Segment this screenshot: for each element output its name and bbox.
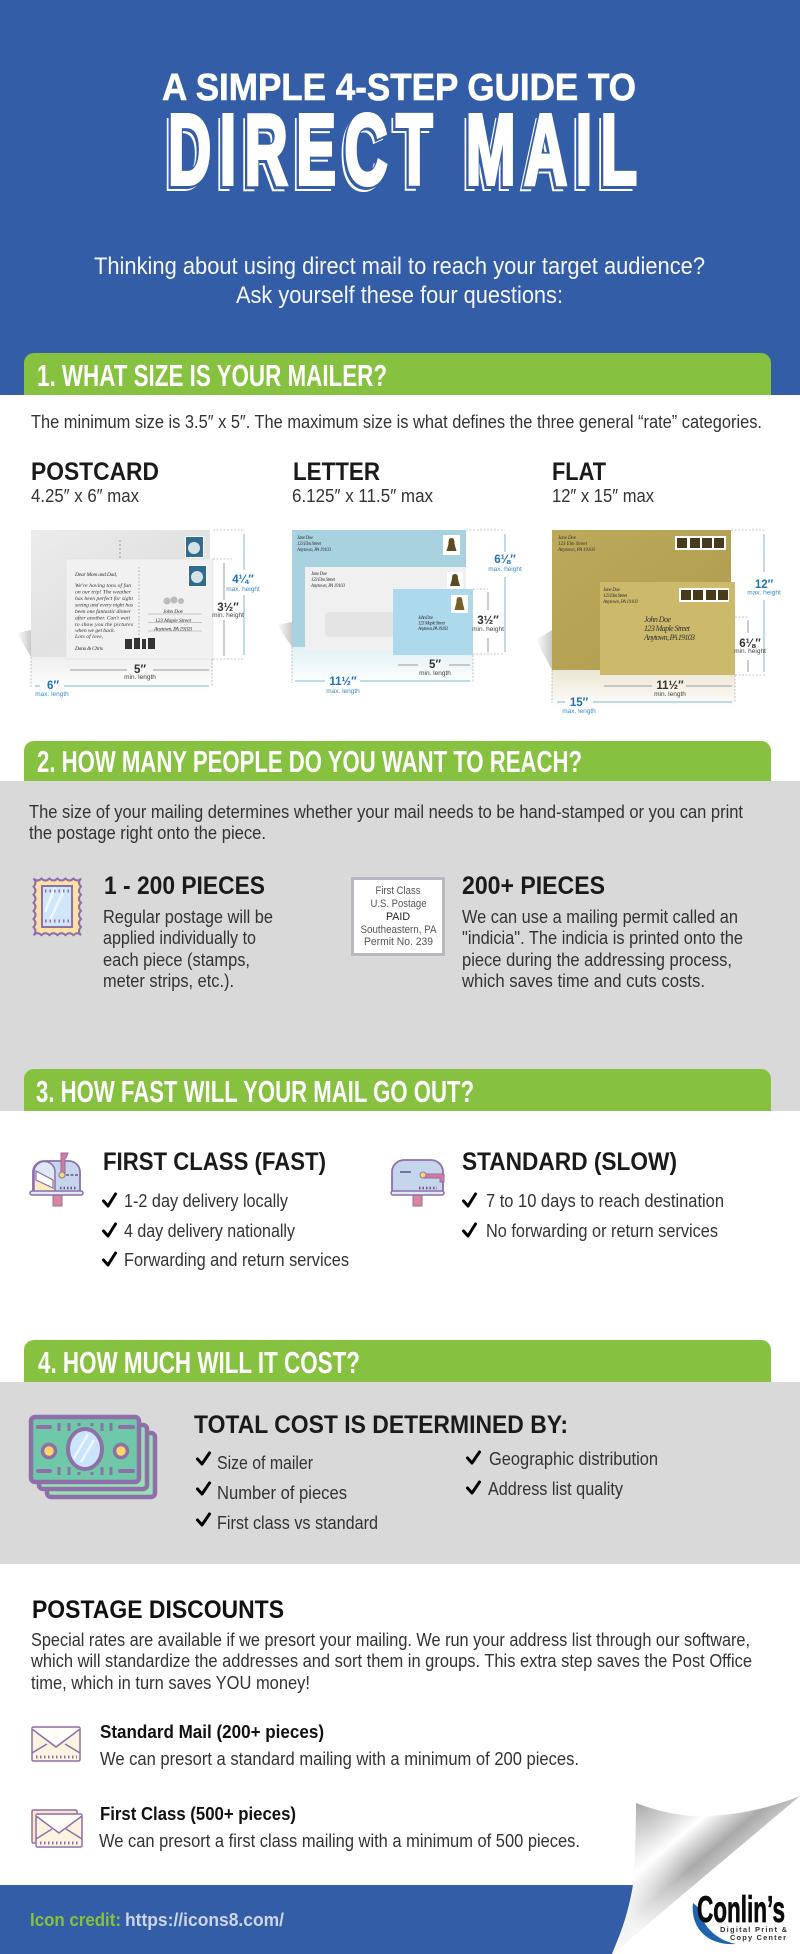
postcard illustration: on our trip! The weather bbox=[75, 590, 132, 596]
indicia box: PAID bbox=[386, 911, 410, 923]
icon: postage stamp bbox=[34, 878, 81, 935]
postage discounts text block: time, which in turn saves YOU money! bbox=[31, 1673, 310, 1693]
1-200 pieces block: Regular postage will be bbox=[103, 907, 273, 927]
flat illustration: John Doe bbox=[644, 615, 671, 624]
icon: money stack bbox=[31, 1417, 155, 1497]
letter heading: LETTER bbox=[293, 458, 380, 486]
postcard illustration: min. height bbox=[212, 612, 244, 619]
letter illustration: 123 Elm Street bbox=[311, 578, 336, 583]
200+ pieces block: which saves time and cuts costs. bbox=[461, 971, 705, 991]
standard block: STANDARD (SLOW) bbox=[462, 1148, 677, 1176]
section 2 intro text: The size of your mailing determines whether your mail needs to be hand-stamped or you can print bbox=[29, 802, 743, 822]
flat illustration: min. length bbox=[654, 691, 686, 698]
letter illustration: Jane Doe bbox=[297, 536, 314, 541]
200+ pieces block: We can use a mailing permit called an bbox=[462, 907, 738, 927]
indicia box: First Class bbox=[376, 885, 421, 897]
postcard illustration: 4¼″ bbox=[232, 574, 254, 586]
footer band bbox=[0, 1885, 633, 1954]
postcard heading bbox=[31, 458, 159, 506]
flat illustration bbox=[536, 530, 781, 715]
first class discount: First Class (500+ pieces) bbox=[100, 1804, 296, 1824]
title line 2: direct mail: DIRECT MAIL bbox=[166, 97, 635, 208]
flat illustration: 15″ bbox=[570, 697, 589, 709]
header banner bbox=[0, 0, 800, 395]
postcard illustration: max. length bbox=[35, 691, 69, 698]
flat illustration: Jane Doe bbox=[558, 536, 577, 541]
postcard illustration: after another. Can't wait bbox=[75, 614, 130, 622]
postcard illustration: 6″ bbox=[47, 680, 59, 692]
flat illustration: Anytown, PA 19103 bbox=[557, 548, 596, 553]
section 2 intro text bbox=[29, 802, 743, 843]
first class discount bbox=[99, 1804, 580, 1851]
section 2 heading: 2. HOW MANY PEOPLE DO YOU WANT TO REACH? bbox=[37, 744, 582, 779]
indicia box: Southeastern, PA bbox=[360, 924, 437, 936]
title line 2: direct mail: DIRECT MAIL bbox=[164, 99, 633, 211]
checklist: first class: Forwarding and return services bbox=[124, 1250, 349, 1270]
postcard illustration: min. length bbox=[124, 674, 156, 681]
indicia box: U.S. Postage bbox=[370, 898, 426, 910]
postcard illustration: to show you the pictures bbox=[75, 622, 133, 628]
200+ pieces block: 200+ PIECES bbox=[462, 872, 605, 900]
checklist: standard bbox=[464, 1191, 724, 1241]
postcard illustration: Lots of love, bbox=[74, 633, 104, 640]
letter illustration: max. length bbox=[326, 688, 360, 695]
icon: envelope bbox=[32, 1727, 80, 1761]
checklist: standard: No forwarding or return services bbox=[486, 1221, 718, 1241]
postcard illustration: John Doe bbox=[163, 609, 184, 615]
flat illustration: 123 Elm Street bbox=[603, 594, 628, 599]
flat illustration: min. height bbox=[734, 648, 766, 655]
postage discounts text block: POSTAGE DISCOUNTS bbox=[32, 1596, 284, 1624]
icon: open mailbox bbox=[30, 1153, 83, 1206]
flat illustration: Jane Doe bbox=[603, 588, 621, 593]
flat illustration: max. height bbox=[747, 590, 781, 596]
cost checklist right: Geographic distribution bbox=[489, 1449, 658, 1469]
letter illustration: John Doe bbox=[418, 616, 434, 621]
postcard illustration: 5″ bbox=[134, 664, 146, 676]
postcard illustration: has been perfect for sight bbox=[75, 595, 133, 602]
intro text: Ask yourself these four questions: bbox=[236, 282, 563, 309]
section 4 heading: 4. HOW MUCH WILL IT COST? bbox=[38, 1345, 360, 1380]
postcard illustration: seeing and every night has bbox=[75, 602, 133, 608]
postage discounts text block bbox=[30, 1596, 752, 1693]
cost checklist left: First class vs standard bbox=[217, 1513, 378, 1533]
200+ pieces block: piece during the addressing process, bbox=[462, 950, 732, 970]
standard mail discount: Standard Mail (200+ pieces) bbox=[100, 1722, 324, 1742]
logo: Conlin's: Digital Print & bbox=[720, 1925, 788, 1934]
letter illustration: 123 Maple Street bbox=[418, 622, 446, 626]
title line 1: A SIMPLE 4-STEP GUIDE TO bbox=[162, 67, 636, 109]
checklist: standard: 7 to 10 days to reach destination bbox=[486, 1191, 724, 1211]
flat heading: FLAT bbox=[552, 458, 606, 486]
flat illustration: 123 Maple Street bbox=[644, 624, 691, 633]
section 2 panel bbox=[0, 741, 800, 1111]
postcard illustration: 3½″ bbox=[217, 602, 239, 614]
intro text bbox=[94, 253, 705, 309]
letter illustration: Anytown, PA 19103 bbox=[296, 548, 332, 553]
postcard illustration: when we get back. bbox=[75, 628, 115, 634]
200+ pieces block: "indicia". The indicia is printed onto the bbox=[462, 928, 743, 948]
title line 2: direct mail: DIRECT MAIL bbox=[168, 94, 637, 206]
section 1 heading bbox=[24, 353, 771, 395]
postcard illustration: max. height bbox=[226, 586, 260, 593]
section 2 intro text: the postage right onto the piece. bbox=[29, 823, 266, 843]
standard block bbox=[462, 1148, 724, 1241]
flat illustration: 6⅛″ bbox=[739, 638, 761, 650]
checklist: first class: 1-2 day delivery locally bbox=[124, 1191, 288, 1211]
icon credit: https://icons8.com/ bbox=[125, 1910, 284, 1930]
postcard illustration: Anytown, PA 19103 bbox=[153, 626, 192, 632]
indicia box bbox=[352, 878, 444, 954]
section 3 heading bbox=[24, 1069, 771, 1111]
letter illustration: 3½″ bbox=[477, 615, 499, 627]
cost checklist left: Size of mailer bbox=[217, 1453, 313, 1473]
first class discount: We can presort a first class mailing with a minimum of 500 pieces. bbox=[99, 1831, 580, 1851]
1-200 pieces block bbox=[103, 872, 273, 991]
postcard heading: 4.25″ x 6″ max bbox=[31, 486, 139, 506]
postcard illustration: We're having tons of fun bbox=[75, 582, 131, 589]
1-200 pieces block: meter strips, etc.). bbox=[103, 971, 234, 991]
icon: double envelope bbox=[32, 1810, 82, 1847]
letter illustration bbox=[277, 530, 522, 695]
checklist: first class bbox=[104, 1191, 349, 1270]
intro text: Thinking about using direct mail to reach your target audience? bbox=[94, 253, 705, 280]
letter illustration: max. height bbox=[488, 566, 522, 573]
cost checklist left: Number of pieces bbox=[217, 1483, 347, 1503]
cost checklist left bbox=[198, 1453, 378, 1533]
letter illustration: 11½″ bbox=[329, 676, 357, 688]
letter illustration: min. length bbox=[419, 670, 451, 677]
flat illustration: max. length bbox=[562, 708, 596, 715]
letter illustration: 5″ bbox=[429, 659, 441, 671]
postcard illustration: been one fantastic dinner bbox=[75, 608, 132, 615]
postcard illustration: Dana & Chris bbox=[74, 646, 103, 652]
postcard heading: POSTCARD bbox=[31, 458, 159, 486]
letter illustration: 6⅛″ bbox=[494, 554, 516, 566]
flat illustration: 11½″ bbox=[656, 680, 684, 692]
letter illustration: Jane Doe bbox=[311, 572, 328, 577]
standard mail discount: We can presort a standard mailing with a minimum of 200 pieces. bbox=[100, 1749, 579, 1769]
icon credit bbox=[30, 1910, 284, 1930]
icon: closed mailbox bbox=[391, 1160, 444, 1206]
1-200 pieces block: 1 - 200 PIECES bbox=[104, 872, 265, 900]
logo: Conlin's bbox=[693, 1889, 788, 1944]
letter illustration: min. height bbox=[472, 626, 504, 633]
indicia box: Permit No. 239 bbox=[364, 936, 433, 948]
1-200 pieces block: applied individually to bbox=[103, 928, 256, 948]
postcard illustration: 123 Maple Street bbox=[155, 618, 191, 624]
first class block: FIRST CLASS (FAST) bbox=[103, 1148, 326, 1176]
icon credit: Icon credit: bbox=[30, 1910, 121, 1930]
first class block bbox=[103, 1148, 349, 1270]
section 1 heading: 1. WHAT SIZE IS YOUR MAILER? bbox=[37, 358, 387, 393]
flat illustration: 123 Elm Street bbox=[558, 542, 588, 547]
postcard illustration bbox=[17, 530, 260, 698]
letter illustration: Anytown, PA 19103 bbox=[417, 627, 449, 632]
total cost heading: TOTAL COST IS DETERMINED BY: bbox=[194, 1411, 568, 1439]
standard mail discount bbox=[100, 1722, 579, 1769]
section 3 heading: 3. HOW FAST WILL YOUR MAIL GO OUT? bbox=[36, 1074, 474, 1109]
page curl bbox=[612, 1796, 800, 1954]
letter illustration: Anytown, PA 19103 bbox=[310, 584, 346, 589]
cost checklist right: Address list quality bbox=[488, 1479, 623, 1499]
section 4 panel bbox=[0, 1340, 800, 1564]
postage discounts text block: which will standardize the addresses and sort them in groups. This extra step saves the Post Office bbox=[30, 1651, 752, 1671]
checklist: first class: 4 day delivery nationally bbox=[124, 1221, 295, 1241]
1-200 pieces block: each piece (stamps, bbox=[103, 950, 250, 970]
cost checklist right bbox=[468, 1449, 658, 1499]
letter illustration: 123 Elm Street bbox=[297, 542, 322, 547]
flat heading: 12″ x 15″ max bbox=[552, 486, 654, 506]
flat illustration: Anytown, PA 19103 bbox=[602, 600, 638, 605]
flat illustration: Anytown, PA 19103 bbox=[643, 633, 695, 642]
flat illustration: 12″ bbox=[755, 579, 774, 591]
title line 2: direct mail: DIRECT MAIL bbox=[168, 94, 637, 206]
200+ pieces block bbox=[461, 872, 743, 991]
letter heading: 6.125″ x 11.5″ max bbox=[292, 486, 433, 506]
flat heading bbox=[552, 458, 654, 506]
postcard illustration: Dear Mom and Dad, bbox=[74, 572, 118, 578]
logo: Conlin's: Copy Center bbox=[730, 1933, 786, 1942]
section 4 heading bbox=[24, 1340, 771, 1382]
letter heading bbox=[292, 458, 433, 506]
